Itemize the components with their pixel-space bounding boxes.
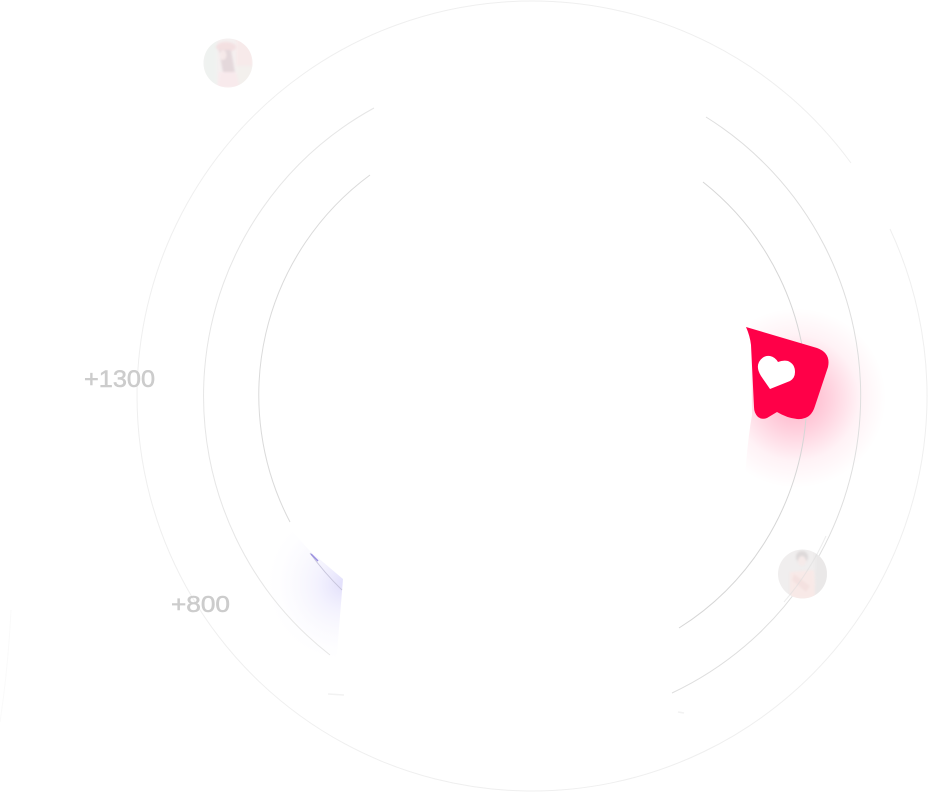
ring passing over portrait (784, 536, 826, 602)
inner ring right arc (679, 182, 807, 628)
pink glow behind like bubble (748, 326, 868, 470)
heart icon (758, 356, 795, 389)
middle ring left arc (204, 108, 374, 655)
middle ring right arc (672, 117, 861, 693)
faint arc far left (0, 610, 11, 722)
inner ring lower left segment (310, 553, 342, 590)
avatar: woman portrait (778, 549, 828, 599)
purple glow near inner ring (262, 525, 343, 665)
label: +800: +800 (171, 591, 230, 617)
avatar: woman in hat (203, 38, 253, 88)
inner ring left arc (259, 175, 370, 522)
bubble shape (746, 327, 829, 419)
label: +1300: +1300 (84, 366, 155, 393)
purple accent on ring (311, 554, 318, 561)
like bubble with heart (746, 327, 829, 419)
faint smudge bottom left (328, 694, 344, 695)
faint smudge bottom right (678, 712, 684, 713)
